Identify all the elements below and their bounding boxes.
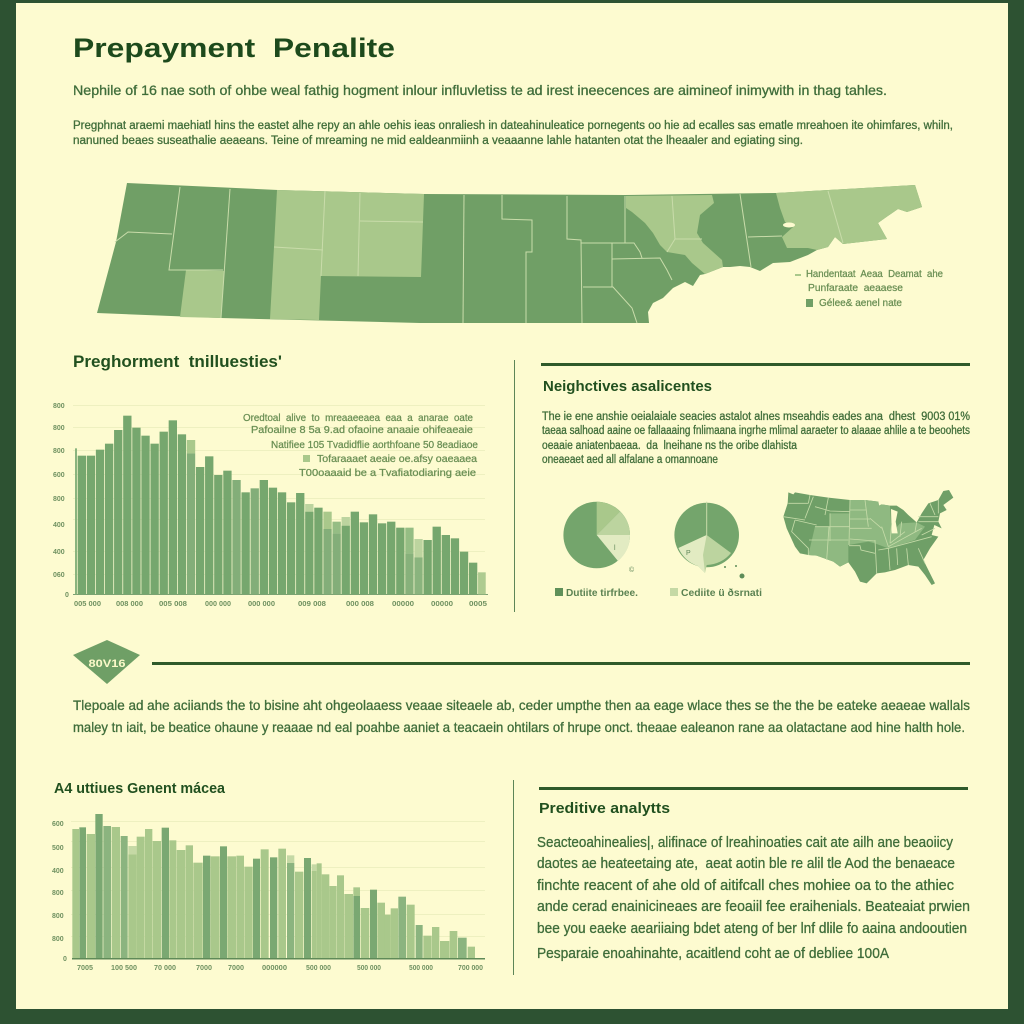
x axis labels: 000 008 — [346, 601, 374, 608]
x axis labels: 70 000 — [154, 965, 176, 972]
section badge: 80V16 — [88, 658, 126, 670]
x axis labels: 000 000 — [248, 601, 275, 608]
y axis labels — [53, 403, 69, 599]
intro text: Nephile of 16 nae soth of ohbe weal fathig hogment inlour influvletiss te ad irest ineecences are aimineof inimywith in thag tahles. — [73, 82, 887, 98]
axis — [72, 958, 485, 960]
x axis labels: 7000 — [228, 965, 244, 972]
section text: Tlepoale ad ahe aciiands the to bisine aht ohgeolaaess veaae siteaele ab, ceder umpthe then aa eage wlace thes se the the be eateke aeaeae wallals — [73, 697, 970, 713]
bar chart: top — [53, 403, 488, 608]
predictive text: daotes ae heateetaing ate, aeat aotin ble re alil tle Aod the benaeace — [537, 856, 955, 872]
map legend: Gélee& aenel nate — [819, 298, 902, 309]
x axis labels: 500 000 — [357, 965, 381, 972]
x axis labels: 7000 — [196, 965, 212, 972]
y axis labels: 400 — [52, 868, 64, 875]
pie legend — [555, 587, 762, 599]
predictive text: ande cerad enainicineaes are feoaiil fee eraihenials. Beateaiat prwien — [537, 899, 970, 915]
bars — [72, 814, 475, 958]
map legend — [795, 269, 943, 309]
y axis labels: 800 — [53, 403, 65, 410]
pie chart 2 — [674, 502, 744, 578]
bar chart: bottom — [52, 814, 485, 972]
chart notes: Oredtoal alive to mreaaeeaea eaa a anarae oate — [243, 413, 473, 424]
predictive text: Seacteoahinealies|, alifinace of lreahinoaties cait ate ailh ane beaoiicy — [537, 835, 954, 851]
description text — [73, 120, 953, 147]
map legend: Handentaat Aeaa Deamat ahe — [806, 269, 943, 280]
heading: predictive analytics: Preditive analytts — [539, 800, 670, 817]
US map — [783, 490, 953, 585]
section badge — [73, 640, 140, 684]
x axis labels: 005 000 — [74, 601, 101, 608]
panel rule: neighbours — [541, 363, 970, 366]
chart grid and axis — [73, 406, 488, 595]
chart notes: T00oaaaid be a Tvafiatodiaring aeie — [299, 468, 476, 479]
right panel text — [542, 411, 970, 466]
x axis labels: 500 000 — [409, 965, 433, 972]
x axis labels: 000 000 — [205, 601, 231, 608]
x axis labels: 500 000 — [306, 965, 331, 972]
x axis labels: 005 008 — [159, 601, 187, 608]
map legend: Punfaraate aeaaese — [808, 283, 903, 294]
y axis labels: 0 — [65, 592, 69, 599]
x axis labels: 000000 — [262, 965, 287, 972]
chart notes — [243, 413, 478, 479]
right panel text: oneaeaet aed all alfalane a omannoane — [542, 454, 718, 466]
divider: bottom columns — [513, 780, 514, 975]
predictive text — [537, 835, 970, 962]
x axis labels: 00000 — [431, 601, 453, 608]
y axis labels: 800 — [52, 913, 64, 920]
pie chart 1: l — [614, 545, 616, 552]
right panel text: The ie ene anshie oeialaiale seacies astalot alnes mseahdis eades ana dhest 9003 01% — [542, 411, 970, 423]
chart notes: Pafoailne 8 5a 9.ad ofaoine anaaie ohifeaeaie — [251, 425, 473, 436]
title: Prepayment Penalite — [73, 33, 395, 63]
x axis labels — [77, 965, 483, 972]
chart notes: Natifiee 105 Tvadidflie aorthfoane 50 8eadiaoe — [271, 440, 478, 451]
predictive text: bee you eaeke aeariiaing bdet ateng of ber lnf dlile fo aaina andooutien — [537, 921, 967, 937]
section rule — [152, 662, 970, 665]
x axis labels: 0005 — [469, 601, 487, 608]
x axis labels — [74, 601, 487, 608]
y axis labels: 800 — [53, 448, 65, 455]
bars — [75, 416, 486, 594]
y axis labels: 600 — [52, 821, 64, 828]
y axis labels — [52, 821, 67, 963]
choropleth map band — [97, 183, 922, 323]
y axis labels: 0 — [63, 956, 67, 963]
heading: left chart: Preghorment tnilluesties' — [73, 352, 282, 371]
y axis labels: 600 — [53, 472, 65, 479]
y axis labels: 400 — [53, 549, 65, 556]
y axis labels: 800 — [53, 496, 65, 503]
y axis labels: 800 — [52, 936, 64, 943]
panel rule: predictive — [539, 787, 968, 790]
pie legend: Dutiite tirfrbee. — [566, 588, 638, 599]
pie chart 1 — [563, 502, 635, 574]
heading: lower chart: A4 uttiues Genent mácea — [54, 781, 226, 797]
y axis labels: 800 — [52, 890, 64, 897]
y axis labels: 060 — [53, 572, 65, 579]
description text: nanuned beaes suseathalie aeaeans. Teine of mreaming ne mid ealdeanmiinh a veaaanne lahle hatanten otat the lheaaler and egiating sing. — [73, 135, 803, 147]
y axis labels: 400 — [53, 522, 65, 529]
section text — [73, 697, 970, 735]
heading: right panel: Neighctives asalicentes — [543, 378, 712, 395]
predictive text: finchte reacent of ahe old of aitifcall ches mohiee oa to the athiec — [537, 878, 954, 894]
right panel text: taeaa salhoad aaine oe fallaaaing fnlimaana ingrhe mlimal aaraeter to alaaae ahlile a te beoohets — [542, 425, 970, 437]
chart notes: Tofaraaaet aeaie oe.afsy oaeaaea — [317, 454, 477, 465]
pie chart 2: P — [686, 550, 691, 557]
x axis labels: 00000 — [392, 601, 414, 608]
chart grid — [71, 822, 485, 936]
x axis labels: 7005 — [77, 965, 93, 972]
section text: maley tn iait, be beatice ohaune y reaaae nd eal poahbe aaniet a teacaein ohtilars of hrupe onct. theaae ealeanon rane aa olatactane aod hine halth hole. — [73, 719, 965, 735]
x axis labels: 009 008 — [298, 601, 326, 608]
pie legend: Cediite ü ðsrnati — [681, 587, 762, 599]
description text: Pregphnat araemi maehiatl hins the eastet alhe repy an ahle oehis ieas onraliesh in dateahinuleatice pornegents oo hie ad ecalles sas ematle mreahoen ite ohimfares, whiln, — [73, 120, 953, 132]
divider: top columns — [514, 360, 515, 612]
x axis labels: 700 000 — [458, 965, 483, 972]
x axis labels: 100 500 — [111, 965, 137, 972]
right panel text: oeaaie aniatenbaeaa. da lneihane ns the oribe dlahista — [542, 440, 798, 452]
y axis labels: 800 — [53, 425, 65, 432]
predictive text: Pesparaie enoahinahte, acaitlend coht ae of debliee 100A — [537, 946, 889, 962]
x axis labels: 008 000 — [116, 601, 143, 608]
pie chart 1: © — [629, 566, 635, 574]
y axis labels: 500 — [52, 845, 64, 852]
